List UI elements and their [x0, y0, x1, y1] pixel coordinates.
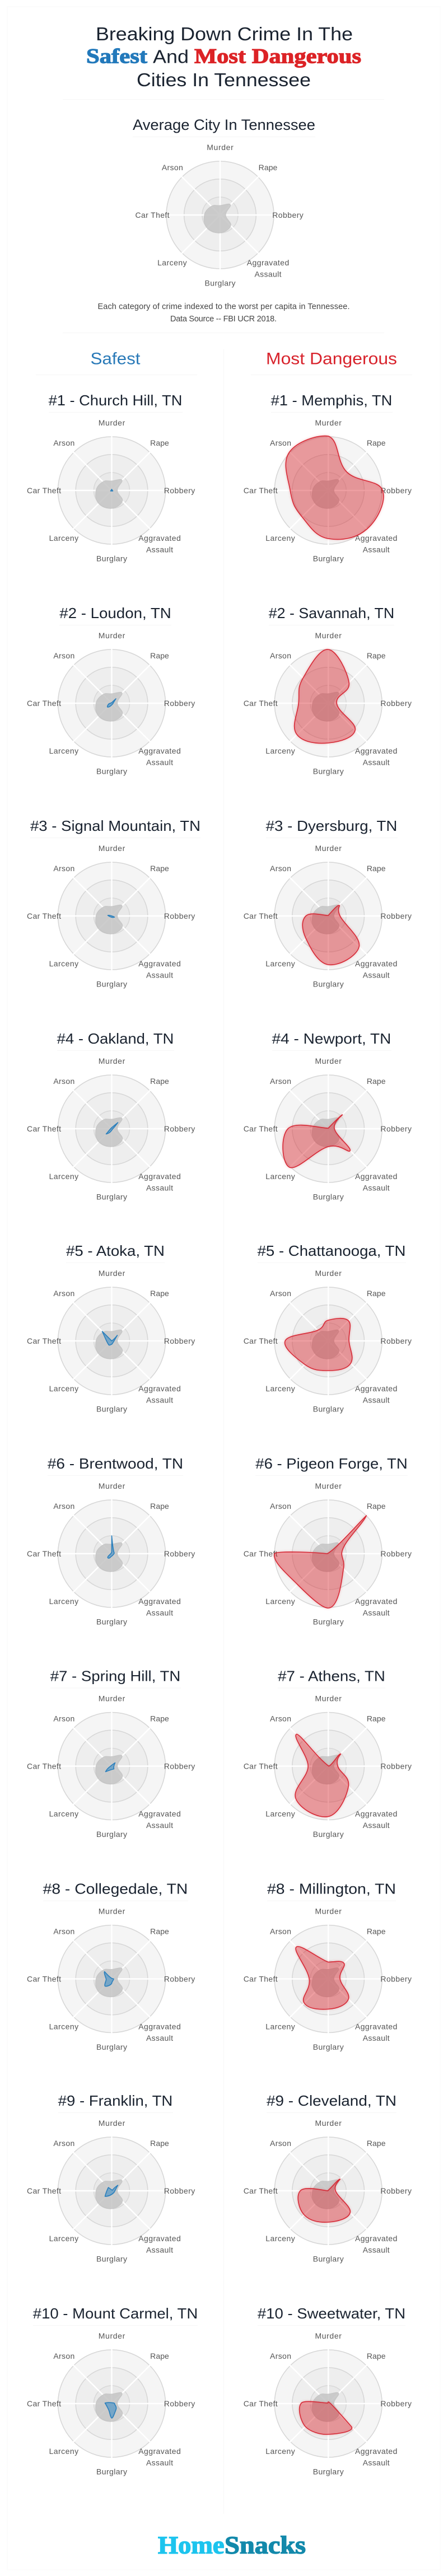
panel: #8 Millington: Burglary: [313, 2042, 344, 2051]
panel: #5 Atoka: Aggravated: [138, 1384, 181, 1393]
panel: #3 Dyersburg: Aggravated: [355, 959, 397, 968]
panel: #3 Dyersburg: Car Theft: [244, 911, 278, 920]
panel: #2 Loudon: #2 - Loudon, TN: [59, 605, 171, 621]
panel: #1 Church Hill: #1 - Church Hill, TN: [49, 392, 182, 409]
radar shape: Millington: [296, 1947, 349, 2009]
radar shape: Chattanooga: [285, 1319, 352, 1371]
panel: #9 Cleveland: Burglary: [313, 2254, 344, 2263]
radar chart: average city: Car Theft: [136, 211, 170, 219]
panel: #8 Millington: Aggravated: [355, 2022, 397, 2031]
panel: #6 Pigeon Forge: Larceny: [265, 1597, 295, 1606]
panel: #4 Newport: Car Theft: [244, 1124, 278, 1133]
panel: #8 Millington: Assault: [363, 2033, 390, 2042]
panel: #7 Athens: Arson: [270, 1714, 291, 1723]
panel: #10 Sweetwater: Murder: [315, 2331, 342, 2340]
panel: #9 Cleveland: Larceny: [265, 2234, 295, 2243]
radar shape: Athens: [295, 1734, 349, 1817]
panel: #3 Signal Mountain: #3 - Signal Mountain, TN: [30, 817, 200, 834]
panel: #9 Franklin: Car Theft: [27, 2186, 61, 2195]
panel: #5 Atoka: Larceny: [49, 1384, 78, 1393]
panel: #10 Sweetwater: Arson: [270, 2351, 291, 2360]
panel: #8 Collegedale: Murder: [99, 1907, 125, 1916]
radar chart: average city: Arson: [162, 163, 183, 172]
panel: #1 Memphis: Car Theft: [244, 486, 278, 495]
panel: #1 Memphis: Rape: [367, 438, 386, 447]
radar shape: Cleveland: [298, 2179, 350, 2222]
radar shape: Sweetwater: [300, 2401, 352, 2434]
panel: #9 Franklin: Rape: [150, 2139, 169, 2148]
panel: #6 Brentwood: Murder: [99, 1481, 125, 1490]
panel: #10 Sweetwater: Larceny: [265, 2447, 295, 2456]
panel: #4 Oakland: Burglary: [96, 1192, 127, 1201]
panel: #4 Newport: Murder: [315, 1056, 342, 1065]
panel: #7 Spring Hill: Robbery: [164, 1761, 195, 1770]
panel: #7 Spring Hill: Burglary: [96, 1830, 127, 1839]
main title: And: [153, 46, 189, 67]
panel: #7 Athens: Assault: [363, 1821, 390, 1830]
panel: #2 Savannah: Aggravated: [355, 746, 397, 755]
panel: #3 Dyersburg: Murder: [315, 844, 342, 853]
panel: #5 Chattanooga: Burglary: [313, 1404, 344, 1413]
panel: #8 Millington: Larceny: [265, 2022, 295, 2031]
panel: #10 Mount Carmel: Larceny: [49, 2447, 78, 2456]
main title: Safest: [86, 45, 148, 68]
panel: average city: [97, 116, 349, 324]
radar chart: average city: Burglary: [205, 278, 235, 287]
panel: #8 Millington: Rape: [367, 1927, 386, 1936]
radar shape: Dyersburg: [302, 905, 360, 965]
panel: #4 Oakland: Car Theft: [27, 1124, 61, 1133]
panel: #5 Atoka: Rape: [150, 1289, 169, 1298]
panel: #10 Sweetwater: Assault: [363, 2458, 390, 2467]
panel: #6 Pigeon Forge: Robbery: [380, 1549, 412, 1558]
panel: #7 Athens: [244, 1667, 412, 1839]
panel: #10 Mount Carmel: Rape: [150, 2351, 169, 2360]
panel: #6 Pigeon Forge: [244, 1455, 412, 1626]
panel: #9 Franklin: Arson: [53, 2139, 74, 2148]
panel: #9 Cleveland: Robbery: [380, 2186, 412, 2195]
panel: #7 Athens: Aggravated: [355, 1810, 397, 1818]
panel: #1 Memphis: Aggravated: [355, 534, 397, 543]
panel: #5 Atoka: [27, 1242, 195, 1413]
radar chart: average city: Aggravated: [247, 258, 289, 267]
panel: #1 Church Hill: Assault: [146, 545, 173, 554]
panel: #10 Mount Carmel: Aggravated: [138, 2447, 181, 2456]
panel: #5 Chattanooga: Arson: [270, 1289, 291, 1298]
radar chart: average city: Larceny: [157, 258, 187, 267]
source note: Each category of crime indexed to the worst per capita in Tennessee.: [97, 302, 349, 311]
panel: #4 Newport: Burglary: [313, 1192, 344, 1201]
radar shape: Brentwood: [108, 1536, 114, 1558]
radar shape: Collegedale: [104, 1972, 114, 1986]
panel: #10 Sweetwater: Robbery: [380, 2399, 412, 2408]
panel: #1 Church Hill: Aggravated: [138, 534, 181, 543]
panel: #3 Signal Mountain: [27, 817, 200, 988]
source note: [97, 302, 349, 324]
panel: #9 Cleveland: Assault: [363, 2246, 390, 2255]
panel: #4 Newport: #4 - Newport, TN: [272, 1030, 391, 1047]
panel: #9 Cleveland: Arson: [270, 2139, 291, 2148]
panel: #7 Athens: Car Theft: [244, 1761, 278, 1770]
panel: #6 Brentwood: [27, 1455, 195, 1626]
panel: #4 Oakland: Aggravated: [138, 1172, 181, 1181]
panel: #2 Loudon: Murder: [99, 631, 125, 640]
panel: #8 Millington: Murder: [315, 1907, 342, 1916]
panel: #6 Brentwood: Burglary: [96, 1617, 127, 1626]
source note: Data Source -- FBI UCR 2018.: [170, 315, 277, 324]
panel: #5 Atoka: #5 - Atoka, TN: [66, 1242, 165, 1259]
panel: #6 Brentwood: Arson: [53, 1502, 74, 1511]
radar chart: average city: Rape: [259, 163, 278, 172]
panel: #3 Signal Mountain: Murder: [99, 844, 125, 853]
panel: #3 Dyersburg: #3 - Dyersburg, TN: [266, 817, 397, 834]
panel: #1 Church Hill: Arson: [53, 438, 74, 447]
panel: #5 Chattanooga: Car Theft: [244, 1336, 278, 1345]
panel: #5 Atoka: Car Theft: [27, 1336, 61, 1345]
panel: #5 Atoka: Burglary: [96, 1404, 127, 1413]
heading: average city: Average City In Tennessee: [133, 116, 315, 133]
panel: #1 Memphis: Burglary: [313, 554, 344, 563]
panel: #3 Signal Mountain: Car Theft: [27, 911, 61, 920]
panel: #8 Collegedale: Robbery: [164, 1974, 195, 1983]
panel: #3 Signal Mountain: Robbery: [164, 911, 195, 920]
panel: #5 Chattanooga: #5 - Chattanooga, TN: [258, 1242, 405, 1259]
panel: #8 Collegedale: Assault: [146, 2033, 173, 2042]
logo: HomeSnacks: [158, 2532, 306, 2559]
panel: #3 Signal Mountain: Larceny: [49, 959, 78, 968]
panel: #5 Chattanooga: Assault: [363, 1396, 390, 1405]
radar shape: Newport: [283, 1115, 350, 1168]
panel: #7 Spring Hill: Aggravated: [138, 1810, 181, 1818]
panel: #6 Pigeon Forge: Assault: [363, 1609, 390, 1617]
panel: #7 Spring Hill: [27, 1667, 195, 1839]
radar shape: Church Hill: [111, 489, 113, 491]
panel: #6 Brentwood: #6 - Brentwood, TN: [48, 1455, 183, 1472]
panel: #6 Pigeon Forge: Rape: [367, 1502, 386, 1511]
panel: #9 Franklin: Larceny: [49, 2234, 78, 2243]
panel: #9 Cleveland: Aggravated: [355, 2234, 397, 2243]
panel: #2 Loudon: [27, 605, 195, 775]
radar shape: Memphis: [286, 436, 384, 539]
panel: #9 Cleveland: Murder: [315, 2119, 342, 2128]
panel: #3 Signal Mountain: Assault: [146, 971, 173, 980]
panel: #8 Millington: Arson: [270, 1927, 291, 1936]
panel: #6 Brentwood: Car Theft: [27, 1549, 61, 1558]
panel: #3 Dyersburg: Larceny: [265, 959, 295, 968]
panel: #4 Newport: Rape: [367, 1077, 386, 1086]
panel: #1 Memphis: [244, 392, 412, 563]
radar chart: average city: Robbery: [272, 211, 304, 219]
panel: #7 Spring Hill: Car Theft: [27, 1761, 61, 1770]
panel: #2 Savannah: Larceny: [265, 746, 295, 755]
radar shape: Franklin: [105, 2185, 118, 2196]
radar shape: Mount Carmel: [105, 2402, 116, 2418]
panel: #4 Oakland: [27, 1030, 195, 1201]
panel: #10 Mount Carmel: Burglary: [96, 2467, 127, 2476]
panel: #10 Mount Carmel: #10 - Mount Carmel, TN: [33, 2305, 198, 2322]
panel: #3 Dyersburg: Arson: [270, 864, 291, 873]
panel: #3 Signal Mountain: Burglary: [96, 979, 127, 988]
panel: #7 Spring Hill: Larceny: [49, 1810, 78, 1818]
panel: #10 Mount Carmel: Robbery: [164, 2399, 195, 2408]
panel: #2 Savannah: Robbery: [380, 699, 412, 708]
panel: #10 Mount Carmel: [27, 2305, 198, 2476]
panel: #9 Franklin: Burglary: [96, 2254, 127, 2263]
panel: #6 Brentwood: Rape: [150, 1502, 169, 1511]
panel: #6 Brentwood: Robbery: [164, 1549, 195, 1558]
panel: #7 Athens: Larceny: [265, 1810, 295, 1818]
panel: #10 Mount Carmel: Car Theft: [27, 2399, 61, 2408]
panel: #10 Sweetwater: Aggravated: [355, 2447, 397, 2456]
panel: #3 Signal Mountain: Aggravated: [138, 959, 181, 968]
panel: #2 Loudon: Burglary: [96, 766, 127, 775]
panel: #3 Signal Mountain: Rape: [150, 864, 169, 873]
panel: #2 Savannah: Burglary: [313, 766, 344, 775]
panel: #5 Chattanooga: Aggravated: [355, 1384, 397, 1393]
panel: #9 Franklin: Aggravated: [138, 2234, 181, 2243]
panel: #5 Atoka: Murder: [99, 1269, 125, 1278]
panel: #8 Collegedale: Arson: [53, 1927, 74, 1936]
radar shape: Spring Hill: [105, 1762, 115, 1771]
panel: #5 Chattanooga: Robbery: [380, 1336, 412, 1345]
panel: #2 Loudon: Aggravated: [138, 746, 181, 755]
panel: #1 Church Hill: Car Theft: [27, 486, 61, 495]
panel: #1 Memphis: Robbery: [380, 486, 412, 495]
main title: Breaking Down Crime In The: [96, 24, 353, 44]
panel: #10 Sweetwater: Rape: [367, 2351, 386, 2360]
panel: #5 Atoka: Robbery: [164, 1336, 195, 1345]
panel: #1 Church Hill: Murder: [99, 418, 125, 427]
panel: #9 Franklin: Murder: [99, 2119, 125, 2128]
panel: #6 Brentwood: Assault: [146, 1609, 173, 1617]
panel: #8 Millington: Car Theft: [244, 1974, 278, 1983]
panel: #4 Oakland: Assault: [146, 1184, 173, 1193]
panel: #2 Savannah: #2 - Savannah, TN: [269, 605, 394, 621]
radar shape: Loudon: [108, 699, 116, 707]
radar chart: average city: [136, 143, 304, 287]
panel: #7 Spring Hill: Murder: [99, 1694, 125, 1703]
panel: #2 Loudon: Robbery: [164, 699, 195, 708]
panel: #4 Oakland: Arson: [53, 1077, 74, 1086]
panel: #10 Sweetwater: Burglary: [313, 2467, 344, 2476]
panel: #5 Chattanooga: Murder: [315, 1269, 342, 1278]
panel: #10 Sweetwater: Car Theft: [244, 2399, 278, 2408]
main title: [86, 24, 361, 90]
radar shape: Atoka: [102, 1331, 118, 1345]
panel: #2 Loudon: Assault: [146, 758, 173, 767]
panel: #9 Cleveland: [244, 2092, 412, 2263]
panel: #2 Savannah: [244, 605, 412, 775]
panel: #4 Oakland: Murder: [99, 1056, 125, 1065]
panel: #5 Chattanooga: [244, 1242, 412, 1413]
panel: #5 Atoka: Assault: [146, 1396, 173, 1405]
panel: #2 Loudon: Rape: [150, 651, 169, 660]
radar shape: Savannah: [295, 649, 355, 744]
main title: Most Dangerous: [194, 45, 361, 68]
panel: #1 Memphis: Arson: [270, 438, 291, 447]
panel: #7 Athens: #7 - Athens, TN: [278, 1667, 385, 1684]
panel: #7 Athens: Murder: [315, 1694, 342, 1703]
panel: #8 Collegedale: #8 - Collegedale, TN: [43, 1880, 188, 1897]
panel: #8 Millington: [244, 1880, 412, 2051]
panel: #6 Pigeon Forge: Car Theft: [244, 1549, 278, 1558]
panel: #8 Collegedale: Rape: [150, 1927, 169, 1936]
panel: #8 Millington: Robbery: [380, 1974, 412, 1983]
panel: #1 Church Hill: Larceny: [49, 534, 78, 543]
panel: #8 Millington: #8 - Millington, TN: [267, 1880, 396, 1897]
panel: #4 Newport: Assault: [363, 1184, 390, 1193]
panel: #4 Newport: [244, 1030, 412, 1201]
panel: #10 Mount Carmel: Arson: [53, 2351, 74, 2360]
panel: #6 Brentwood: Larceny: [49, 1597, 78, 1606]
panel: #2 Loudon: Arson: [53, 651, 74, 660]
panel: #6 Pigeon Forge: Arson: [270, 1502, 291, 1511]
panel: #9 Franklin: Robbery: [164, 2186, 195, 2195]
panel: #6 Pigeon Forge: Burglary: [313, 1617, 344, 1626]
column heading: most dangerous: Most Dangerous: [266, 349, 397, 368]
panel: #4 Newport: Aggravated: [355, 1172, 397, 1181]
radar shape: Pigeon Forge: [274, 1516, 366, 1608]
panel: #6 Pigeon Forge: Aggravated: [355, 1597, 397, 1606]
panel: #1 Church Hill: Rape: [150, 438, 169, 447]
panel: #7 Athens: Rape: [367, 1714, 386, 1723]
radar shape: Signal Mountain: [108, 915, 114, 918]
panel: #1 Church Hill: [27, 392, 195, 563]
panel: #8 Collegedale: Larceny: [49, 2022, 78, 2031]
panel: #1 Memphis: Murder: [315, 418, 342, 427]
panel: #9 Franklin: #9 - Franklin, TN: [58, 2092, 172, 2109]
panel: #9 Cleveland: #9 - Cleveland, TN: [267, 2092, 396, 2109]
panel: #3 Dyersburg: [244, 817, 412, 988]
panel: #2 Loudon: Car Theft: [27, 699, 61, 708]
panel: #7 Spring Hill: #7 - Spring Hill, TN: [50, 1667, 180, 1684]
panel: #2 Loudon: Larceny: [49, 746, 78, 755]
panel: #10 Sweetwater: [244, 2305, 412, 2476]
panel: #9 Cleveland: Rape: [367, 2139, 386, 2148]
panel: #7 Spring Hill: Assault: [146, 1821, 173, 1830]
panel: #8 Collegedale: Burglary: [96, 2042, 127, 2051]
panel: #8 Collegedale: Car Theft: [27, 1974, 61, 1983]
panel: #10 Mount Carmel: Murder: [99, 2331, 125, 2340]
panel: #10 Mount Carmel: Assault: [146, 2458, 173, 2467]
panel: #3 Dyersburg: Burglary: [313, 979, 344, 988]
panel: #1 Memphis: Larceny: [265, 534, 295, 543]
panel: #10 Sweetwater: #10 - Sweetwater, TN: [258, 2305, 405, 2322]
panel: #6 Brentwood: Aggravated: [138, 1597, 181, 1606]
panel: #9 Cleveland: Car Theft: [244, 2186, 278, 2195]
panel: #2 Savannah: Car Theft: [244, 699, 278, 708]
radar chart: average city: Murder: [207, 143, 234, 152]
panel: #6 Pigeon Forge: #6 - Pigeon Forge, TN: [255, 1455, 408, 1472]
panel: #4 Oakland: Robbery: [164, 1124, 195, 1133]
panel: #4 Newport: Arson: [270, 1077, 291, 1086]
main title: Cities In Tennessee: [137, 69, 311, 90]
panel: #2 Savannah: Arson: [270, 651, 291, 660]
panel: #9 Franklin: [27, 2092, 195, 2263]
panel: #6 Pigeon Forge: Murder: [315, 1481, 342, 1490]
panel: #4 Oakland: #4 - Oakland, TN: [57, 1030, 174, 1047]
panel: #2 Savannah: Assault: [363, 758, 390, 767]
radar chart: average city: Assault: [254, 270, 282, 279]
panel: #7 Athens: Burglary: [313, 1830, 344, 1839]
logo: HomeSnacks: Snacks: [225, 2532, 306, 2559]
panel: #5 Atoka: Arson: [53, 1289, 74, 1298]
panel: #4 Oakland: Larceny: [49, 1172, 78, 1181]
panel: #1 Memphis: #1 - Memphis, TN: [271, 392, 392, 409]
panel: #2 Savannah: Murder: [315, 631, 342, 640]
panel: #7 Athens: Robbery: [380, 1761, 412, 1770]
panel: #1 Church Hill: Burglary: [96, 554, 127, 563]
panel: #7 Spring Hill: Rape: [150, 1714, 169, 1723]
panel: #9 Franklin: Assault: [146, 2246, 173, 2255]
panel: #2 Savannah: Rape: [367, 651, 386, 660]
panel: #4 Oakland: Rape: [150, 1077, 169, 1086]
panel: #4 Newport: Robbery: [380, 1124, 412, 1133]
panel: #1 Memphis: Assault: [363, 545, 390, 554]
logo: HomeSnacks: Home: [158, 2532, 224, 2559]
column heading: safest: Safest: [91, 349, 141, 368]
panel: #5 Chattanooga: Larceny: [265, 1384, 295, 1393]
panel: #3 Dyersburg: Rape: [367, 864, 386, 873]
panel: #1 Church Hill: Robbery: [164, 486, 195, 495]
panel: #3 Dyersburg: Assault: [363, 971, 390, 980]
panel: #7 Spring Hill: Arson: [53, 1714, 74, 1723]
panel: #8 Collegedale: Aggravated: [138, 2022, 181, 2031]
radar shape: Oakland: [106, 1123, 118, 1134]
panel: #3 Dyersburg: Robbery: [380, 911, 412, 920]
panel: #5 Chattanooga: Rape: [367, 1289, 386, 1298]
panel: #4 Newport: Larceny: [265, 1172, 295, 1181]
panel: #3 Signal Mountain: Arson: [53, 864, 74, 873]
panel: #8 Collegedale: [27, 1880, 195, 2051]
